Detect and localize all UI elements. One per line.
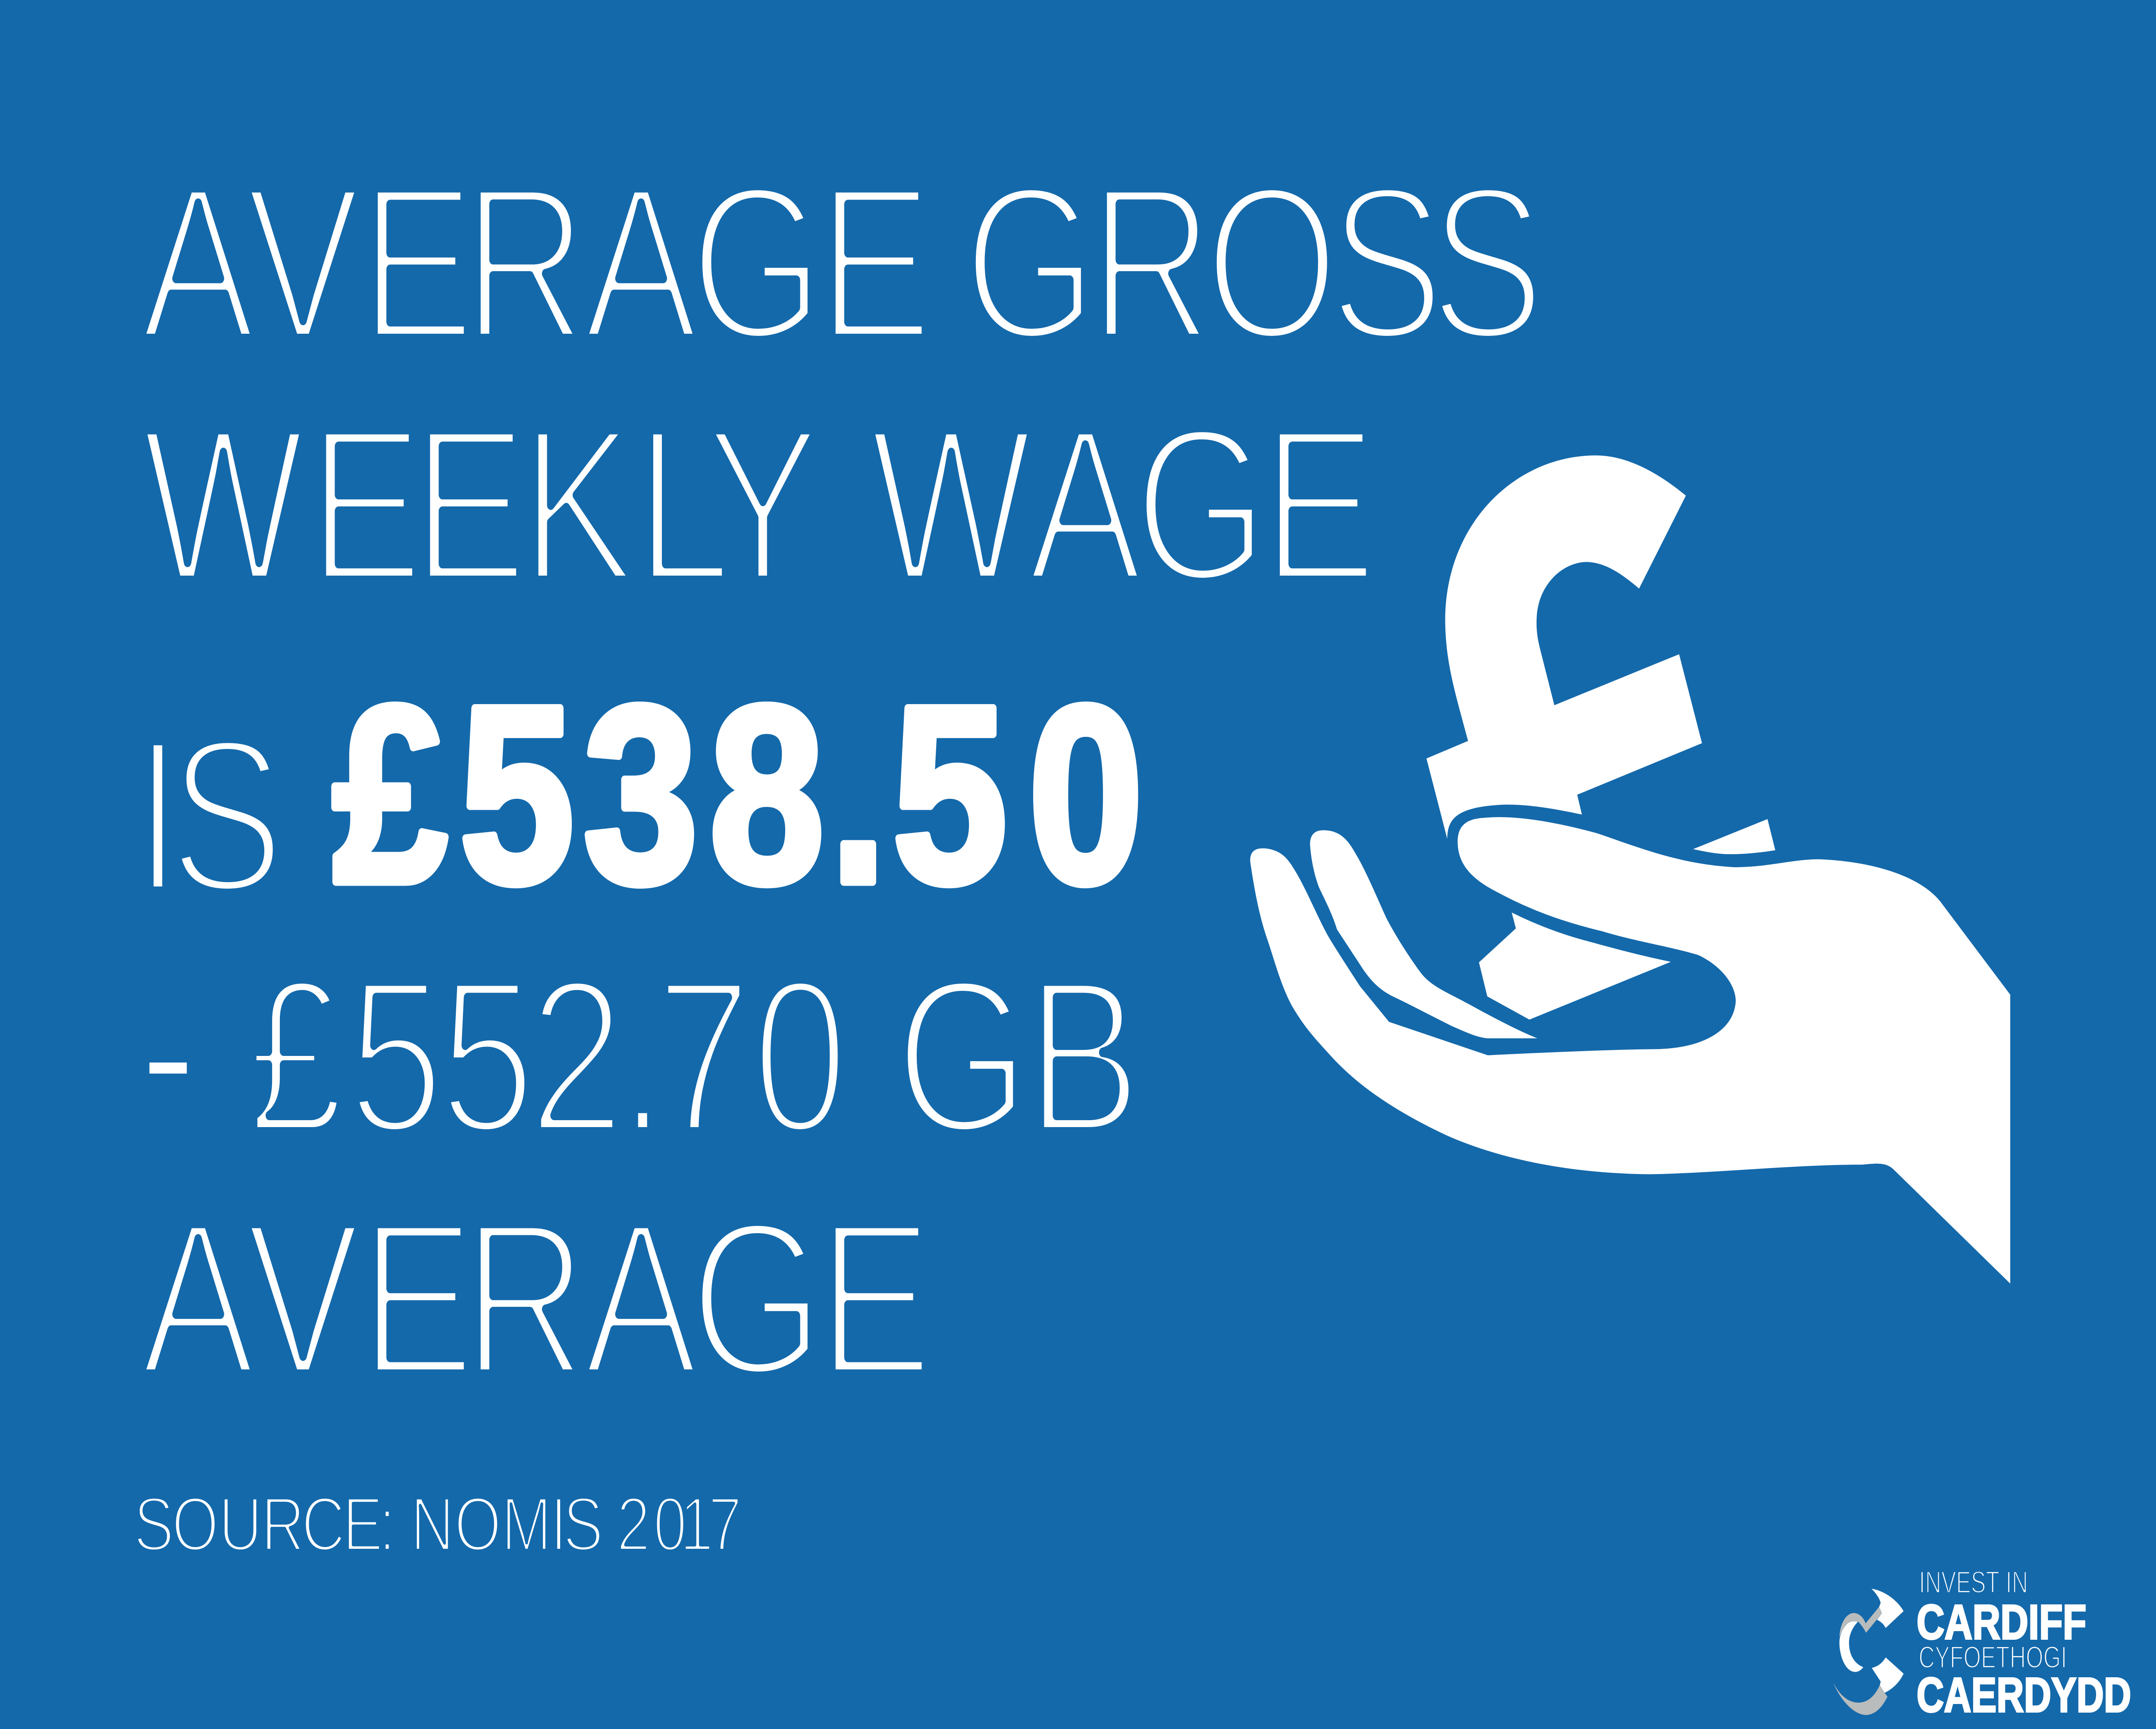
heading line: weekly wage: WEEKLY WAGE bbox=[142, 382, 1377, 627]
heading line: GB comparison figure: £552.70 GB bbox=[180, 933, 1141, 1178]
heading line: average gross: AVERAGE GROSS bbox=[141, 140, 1545, 385]
logo mark: lower grey ribbon bbox=[1833, 1683, 1887, 1715]
logo mark: upper grey ribbon bbox=[1839, 1607, 1882, 1637]
logo mark: white C bbox=[1839, 1621, 1863, 1672]
pound sign: upper part bbox=[1426, 455, 1702, 839]
key figure: £538.50: £538.50 bbox=[332, 654, 1143, 936]
logo: Invest in Cardiff / Cyfoethogi Caerdydd bbox=[1833, 1565, 2131, 1722]
hand: finger bbox=[1310, 830, 1537, 1038]
heading line: average: AVERAGE bbox=[141, 1176, 933, 1421]
logo mark bbox=[1833, 1589, 1904, 1715]
logo text: cardiff: CARDIFF bbox=[1917, 1595, 2087, 1649]
pound sign: base end bbox=[1693, 819, 1775, 854]
logo text: caerdydd: CAERDYDD bbox=[1917, 1668, 2131, 1722]
icon: hand holding pound sign bbox=[1250, 455, 2010, 1284]
headline text block bbox=[134, 140, 1545, 1421]
heading line: is: IS bbox=[134, 693, 285, 938]
hand: palm and thumb bbox=[1250, 817, 2010, 1284]
pound sign: lower part bbox=[1479, 912, 1671, 1020]
heading line: GB comparison figure: - bbox=[139, 928, 197, 1173]
logo mark: lower white shape bbox=[1872, 1657, 1904, 1693]
logo text: invest in: INVEST IN bbox=[1919, 1565, 2028, 1600]
logo text: cyfoethogi: CYFOETHOGI bbox=[1918, 1640, 2067, 1675]
source note: SOURCE: NOMIS 2017 bbox=[134, 1481, 742, 1567]
logo mark: top white shape bbox=[1871, 1589, 1904, 1628]
